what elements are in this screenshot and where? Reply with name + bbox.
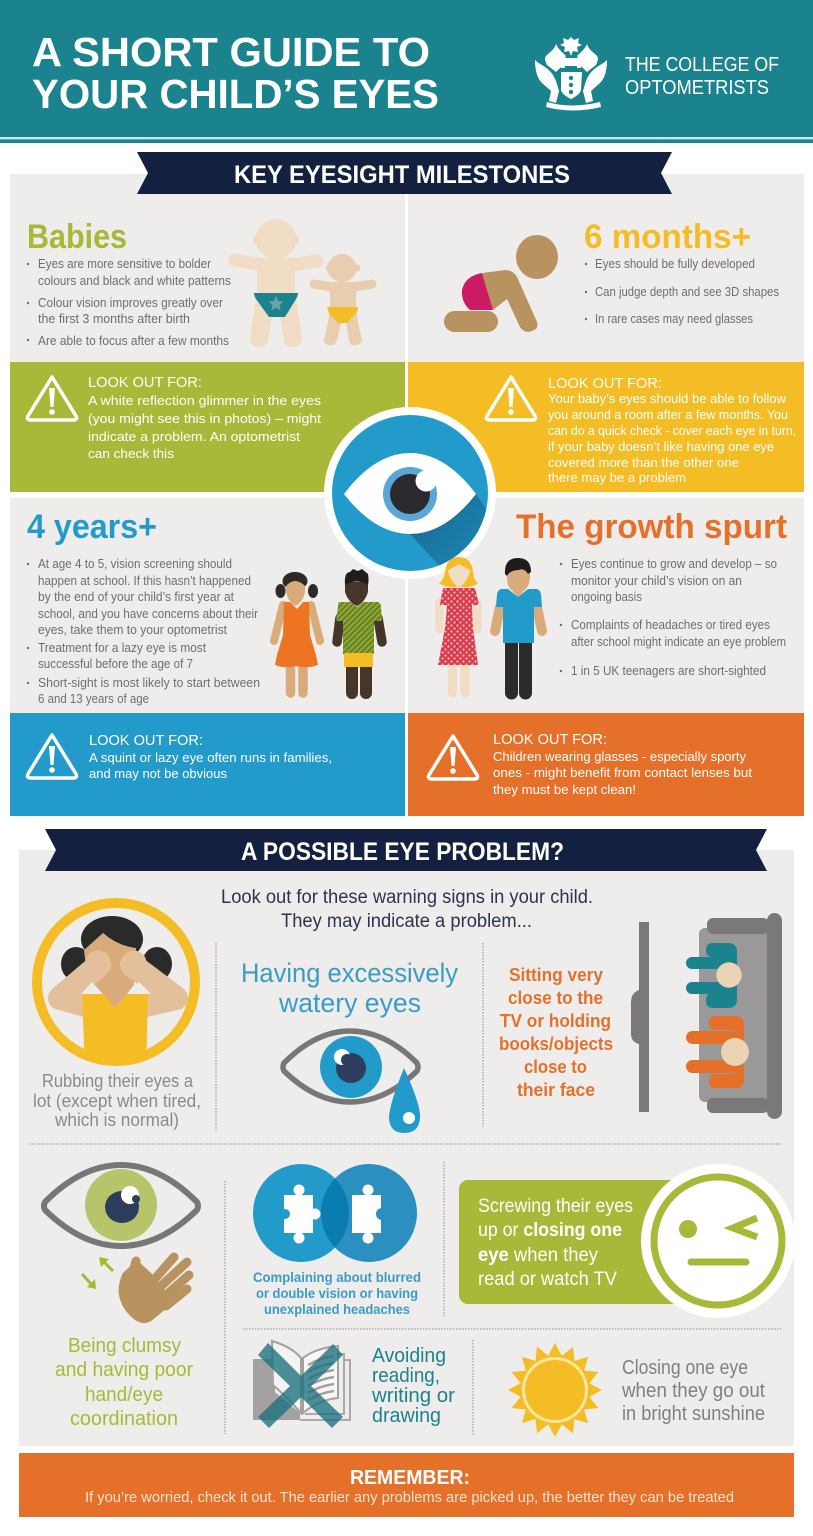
banner: a possible eye problem <box>45 829 767 871</box>
text: sitting close: close to the <box>508 987 603 1008</box>
text: babies bullets: Eyes are more sensitive to bolder <box>38 257 211 271</box>
text: avoiding reading: drawing <box>372 1404 441 1427</box>
text: blurred vision caption: Complaining about blurred <box>253 1269 421 1285</box>
panel: babies <box>27 218 372 348</box>
text: growth spurt bullets <box>560 557 786 678</box>
text: yellow look out <box>548 376 796 485</box>
text: rubbing caption: lot (except when tired, <box>33 1091 201 1111</box>
text: closing one eye: when they go out <box>621 1380 765 1402</box>
icon: winking face <box>641 1164 795 1318</box>
icon: college crest <box>535 37 607 110</box>
text: 4 years bullets: happen at school. If this hasn’t happened <box>38 574 251 588</box>
text: orange look out: ones - might benefit from contact lenses but <box>493 766 753 780</box>
icon: tv and sofa with children <box>631 913 782 1119</box>
text: orange look out <box>493 732 753 797</box>
text: 4 years bullets: Treatment for a lazy eye is most <box>38 641 206 655</box>
icon: warning triangle <box>27 377 77 420</box>
text: green look out: (you might see this in photos) – might <box>88 412 322 426</box>
text: 4 years bullets <box>27 557 260 706</box>
text: sitting close <box>499 964 613 1100</box>
text: green look out: A white reflection glimmer in the eyes <box>88 394 321 408</box>
heading: 6 months: 6 months+ <box>584 218 751 256</box>
text: screwing eyes: eye when they <box>478 1245 598 1266</box>
text: clumsy caption: coordination <box>70 1408 178 1430</box>
text: blue look out: LOOK OUT FOR: <box>89 733 203 749</box>
text: closing one eye: in bright sunshine <box>622 1403 765 1425</box>
text: screwing eyes: up or closing one <box>478 1220 622 1241</box>
text: rubbing caption <box>33 1071 201 1130</box>
icon: girl in orange dress <box>274 572 320 693</box>
icon: hand <box>120 1257 189 1322</box>
icon: central eye <box>324 407 496 579</box>
text: babies bullets: Colour vision improves greatly over <box>38 296 223 310</box>
text: growth spurt bullets: ongoing basis <box>571 590 642 604</box>
text: green look out <box>88 375 322 461</box>
text: orange look out: they must be kept clean! <box>493 783 636 797</box>
text: growth spurt bullets: after school might indicate an eye problem <box>571 635 786 649</box>
panel: remember <box>19 1453 794 1517</box>
text: clumsy caption: and having poor <box>55 1359 193 1381</box>
panel: growth spurt <box>438 508 787 693</box>
text: 6 months bullets: Eyes should be fully developed <box>595 257 755 271</box>
text: 4 years bullets: 6 and 13 years of age <box>38 692 149 706</box>
text: sitting close: close to <box>524 1056 587 1077</box>
banner: key eyesight milestones: KEY EYESIGHT MILESTONES <box>234 161 570 189</box>
panel: possible eye problem background <box>19 850 794 1446</box>
text: blue look out: A squint or lazy eye often runs in families, <box>89 751 332 765</box>
text: growth spurt bullets: Complaints of headaches or tired eyes <box>571 618 770 632</box>
text: yellow look out: you around a room after a few months. You <box>548 408 788 422</box>
icon: book crossed out <box>253 1341 350 1428</box>
text: sitting close: TV or holding <box>500 1010 611 1031</box>
text: closing one eye <box>621 1357 765 1425</box>
text: watery eyes heading <box>241 958 458 1018</box>
text: orange look out: Children wearing glasses - especially sporty <box>493 750 747 764</box>
panel: milestones background <box>10 174 804 713</box>
icon: small baby <box>314 254 372 345</box>
panel: blue look out <box>10 713 405 816</box>
icon: green eye <box>44 1165 198 1246</box>
text: yellow look out: if your baby doesn’t like having one eye <box>548 440 774 454</box>
panel: remember: If you’re worried, check it out. The earlier any problems are picked up, the better they can be treated <box>85 1489 734 1506</box>
panel: yellow look out <box>408 362 804 492</box>
text: screwing eyes: Screwing their eyes <box>478 1196 633 1217</box>
icon: arrows <box>82 1257 113 1289</box>
text: babies bullets: the first 3 months after birth <box>38 312 190 326</box>
title <box>32 29 439 117</box>
text: rubbing caption: which is normal) <box>54 1110 179 1130</box>
text: growth spurt bullets: monitor your child’s vision on an <box>571 574 742 588</box>
header band <box>0 0 813 143</box>
college name: THE COLLEGE OF <box>625 54 779 76</box>
icon: girl in red dress <box>438 557 479 693</box>
text: rubbing caption: Rubbing their eyes a <box>42 1071 194 1091</box>
text: closing one eye: Closing one eye <box>622 1357 748 1379</box>
text: yellow look out: Your baby’s eyes should be able to follow <box>548 392 787 406</box>
text: 6 months bullets <box>585 257 779 326</box>
text: yellow look out: can do a quick check - cover each eye in turn, <box>548 424 796 438</box>
banner: key eyesight milestones <box>137 152 672 194</box>
text: blue look out: and may not be obvious <box>89 767 227 781</box>
panel: remember: REMEMBER: <box>350 1467 470 1489</box>
text: blue look out <box>89 733 332 781</box>
text: babies bullets: colours and black and white patterns <box>38 274 231 288</box>
heading: babies: Babies <box>27 218 127 256</box>
text: sitting close: Sitting very <box>509 964 604 985</box>
text: blurred vision caption: or double vision or having <box>256 1285 418 1301</box>
text: clumsy caption <box>55 1335 193 1430</box>
icon: boy in striped shirt <box>336 569 382 693</box>
text: sitting close: their face <box>517 1079 595 1100</box>
text: yellow look out: LOOK OUT FOR: <box>548 376 662 392</box>
text: babies bullets: Are able to focus after a few months <box>38 334 229 348</box>
icon: warning triangle <box>486 377 536 420</box>
text: 4 years bullets: At age 4 to 5, vision screening should <box>38 557 232 571</box>
icon: child rubbing eyes <box>37 903 195 1070</box>
panel: orange look out <box>408 713 804 816</box>
text: yellow look out: covered more than the other one <box>548 456 739 470</box>
text: green look out: can check this <box>88 447 174 461</box>
text: avoiding reading <box>371 1344 455 1427</box>
text: 4 years bullets: eyes, take them to your optometrist <box>38 623 228 637</box>
text: blurred vision caption <box>253 1269 421 1317</box>
text: sitting close: books/objects <box>499 1033 613 1054</box>
college name: OPTOMETRISTS <box>625 77 769 99</box>
icon: large baby <box>235 219 317 347</box>
title: YOUR CHILD’S EYES <box>32 71 439 117</box>
text: clumsy caption: Being clumsy <box>68 1335 181 1357</box>
icon: crawling baby <box>444 235 558 332</box>
text: avoiding reading: Avoiding <box>372 1344 446 1367</box>
text: orange look out: LOOK OUT FOR: <box>493 732 607 748</box>
text: intro <box>221 887 593 932</box>
text: babies bullets <box>27 257 231 348</box>
text: green look out: LOOK OUT FOR: <box>88 375 202 391</box>
text: 6 months bullets: In rare cases may need glasses <box>595 312 753 326</box>
text: avoiding reading: writing or <box>371 1384 455 1407</box>
text: 4 years bullets: school, and you have concerns about their <box>38 607 258 621</box>
text: growth spurt bullets: 1 in 5 UK teenagers are short-sighted <box>571 664 766 678</box>
text: growth spurt bullets: Eyes continue to grow and develop – so <box>571 557 777 571</box>
icon: sun <box>508 1343 602 1437</box>
text: watery eyes heading: Having excessively <box>241 958 458 988</box>
text: 4 years bullets: Short-sight is most likely to start between <box>38 676 260 690</box>
banner: a possible eye problem: A POSSIBLE EYE PROBLEM? <box>241 838 564 866</box>
text: blurred vision caption: unexplained headaches <box>264 1301 410 1317</box>
text: intro: They may indicate a problem... <box>281 911 532 932</box>
icon: boy in blue shirt <box>495 558 542 693</box>
panel: 6 months <box>444 218 779 332</box>
icon: watery eye with tear <box>283 1031 420 1133</box>
text: yellow look out: there may be a problem <box>548 471 686 485</box>
text: intro: Look out for these warning signs in your child. <box>221 887 593 908</box>
text: watery eyes heading: watery eyes <box>278 988 421 1018</box>
icon: double vision puzzle circles <box>253 1164 417 1262</box>
text: clumsy caption: hand/eye <box>85 1384 163 1406</box>
icon: warning triangle <box>27 735 77 778</box>
text: screwing eyes <box>478 1196 633 1290</box>
icon: warning triangle <box>428 736 478 779</box>
college name <box>625 54 779 99</box>
text: screwing eyes: read or watch TV <box>478 1269 617 1290</box>
text: green look out: indicate a problem. An optometrist <box>88 430 301 444</box>
title: A SHORT GUIDE TO <box>32 29 430 75</box>
panel: screwing eyes callout <box>459 1164 795 1318</box>
text: 4 years bullets: successful before the age of 7 <box>38 657 193 671</box>
heading: 4 years: 4 years+ <box>27 508 157 546</box>
heading: growth spurt: The growth spurt <box>516 508 787 546</box>
panel: 4 years <box>27 508 382 706</box>
text: 6 months bullets: Can judge depth and see 3D shapes <box>595 285 779 299</box>
panel: green look out <box>10 362 405 492</box>
text: avoiding reading: reading, <box>372 1364 440 1387</box>
text: 4 years bullets: by the end of your child’s first year at <box>38 590 234 604</box>
